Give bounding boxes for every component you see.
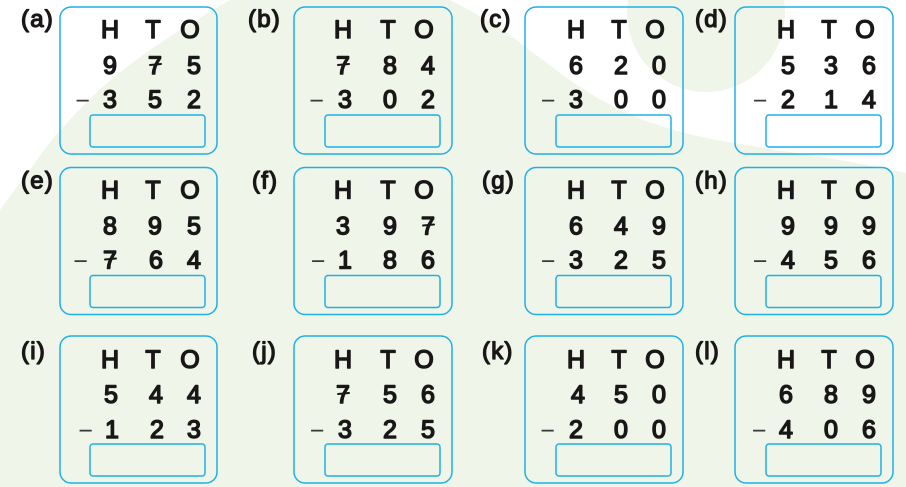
panel: a xyxy=(21,6,217,154)
answer box e xyxy=(90,276,205,308)
frame f xyxy=(294,168,452,314)
header l: HTO xyxy=(777,346,875,374)
bottom number g: 325 xyxy=(569,246,666,274)
label h: (h) xyxy=(695,168,728,194)
bottom number i: 123 xyxy=(105,416,201,444)
top number j: 756 xyxy=(336,381,435,409)
panel: d xyxy=(695,6,893,154)
top number g: 649 xyxy=(569,212,666,240)
label d: (d) xyxy=(695,6,728,33)
bottom number l: 406 xyxy=(779,416,876,444)
panel: l xyxy=(695,336,893,483)
minus a: − xyxy=(75,87,90,115)
answer box l xyxy=(766,444,881,476)
bottom number h: 456 xyxy=(781,246,876,274)
answer box f xyxy=(325,276,440,308)
minus j: − xyxy=(310,417,324,445)
seven crossbar a xyxy=(150,64,161,65)
panel: g xyxy=(482,168,683,314)
bottom number e: 764 xyxy=(103,246,201,274)
panel: f xyxy=(252,168,452,314)
frame a xyxy=(60,7,217,154)
header e: HTO xyxy=(101,176,200,204)
frame l xyxy=(735,336,893,483)
minus k: − xyxy=(540,417,555,445)
label k: (k) xyxy=(482,338,514,365)
top number a: 975 xyxy=(103,52,201,80)
label a: (a) xyxy=(21,6,54,33)
answer box g xyxy=(556,276,671,308)
panel: i xyxy=(21,336,217,483)
minus c: − xyxy=(541,87,555,115)
minus i: − xyxy=(78,417,93,445)
top number f: 397 xyxy=(336,212,435,240)
top number c: 620 xyxy=(569,52,666,80)
top number e: 895 xyxy=(103,212,201,240)
header h: HTO xyxy=(777,176,875,204)
frame c xyxy=(525,7,683,154)
answer box c xyxy=(556,115,671,147)
answer box h xyxy=(766,276,881,308)
label l: (l) xyxy=(695,338,720,365)
label i: (i) xyxy=(21,338,46,365)
frame d xyxy=(735,7,893,154)
frame h xyxy=(735,168,893,314)
panel: b xyxy=(248,6,452,154)
answer box b xyxy=(325,115,440,147)
label f: (f) xyxy=(252,168,278,194)
label e: (e) xyxy=(21,168,54,194)
answer box i xyxy=(90,444,205,476)
answer box k xyxy=(556,444,671,476)
label j: (j) xyxy=(252,338,277,365)
frame j xyxy=(294,336,452,483)
frame k xyxy=(525,336,683,483)
seven crossbar b xyxy=(338,64,349,65)
minus e: − xyxy=(73,248,88,276)
bottom number f: 186 xyxy=(338,246,435,274)
header k: HTO xyxy=(567,346,665,374)
frame e xyxy=(60,168,217,314)
label g: (g) xyxy=(482,168,515,194)
header a: HTO xyxy=(101,16,200,44)
bottom number c: 300 xyxy=(569,86,666,114)
answer box d xyxy=(766,115,881,147)
panel: j xyxy=(252,336,452,483)
minus f: − xyxy=(311,248,325,276)
panel: k xyxy=(482,336,683,483)
header f: HTO xyxy=(334,176,434,204)
label b: (b) xyxy=(248,6,281,33)
top number d: 536 xyxy=(781,52,876,80)
top number b: 784 xyxy=(336,52,435,80)
top number h: 999 xyxy=(781,212,876,240)
bottom number a: 352 xyxy=(103,86,201,114)
bottom number j: 325 xyxy=(338,416,435,444)
seven crossbar e xyxy=(105,258,116,260)
top number i: 544 xyxy=(104,381,201,409)
background: pale green circle xyxy=(627,0,785,92)
header d: HTO xyxy=(777,16,875,44)
top number l: 689 xyxy=(779,381,876,409)
panel: h xyxy=(695,168,893,314)
minus g: − xyxy=(541,248,555,276)
seven crossbar f xyxy=(423,224,434,226)
frame g xyxy=(525,168,683,314)
header g: HTO xyxy=(567,176,665,204)
header j: HTO xyxy=(334,346,434,374)
header c: HTO xyxy=(567,16,665,44)
top number k: 450 xyxy=(571,381,666,409)
minus l: − xyxy=(752,417,766,445)
frame i xyxy=(60,336,217,483)
bottom number b: 302 xyxy=(338,86,435,114)
answer box j xyxy=(325,444,440,476)
panel: e xyxy=(21,168,217,314)
minus h: − xyxy=(753,248,767,276)
header i: HTO xyxy=(101,346,200,374)
frame b xyxy=(294,7,452,154)
header b: HTO xyxy=(334,16,434,44)
label c: (c) xyxy=(480,6,512,33)
bottom number k: 200 xyxy=(569,416,666,444)
bottom number d: 214 xyxy=(781,86,876,114)
answer box a xyxy=(90,115,205,147)
minus b: − xyxy=(309,87,324,115)
minus d: − xyxy=(753,87,767,115)
seven crossbar j xyxy=(338,393,349,394)
panel: c xyxy=(480,6,683,154)
